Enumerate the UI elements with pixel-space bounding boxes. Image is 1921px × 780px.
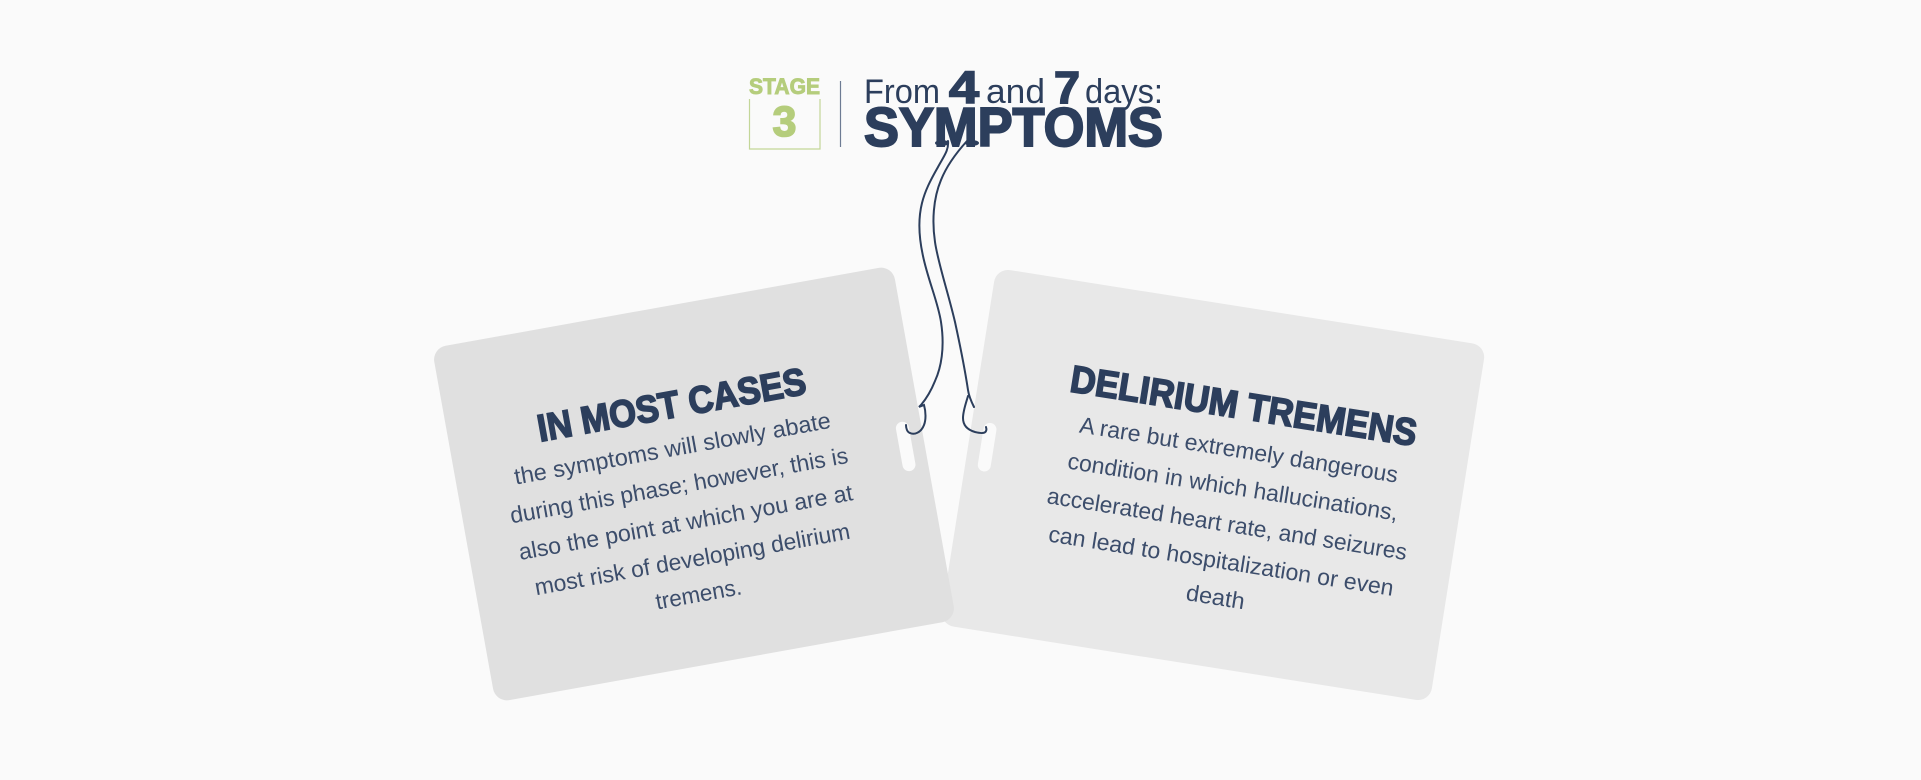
text block: delirium tremens description: A rare but extremely dangerous	[1078, 412, 1400, 488]
stage label: STAGE	[749, 74, 820, 99]
panel: in most cases card	[432, 265, 956, 703]
title line: from 4 and 7 days: From	[864, 73, 940, 111]
title	[864, 62, 1163, 158]
stage box	[750, 99, 820, 149]
text block: delirium tremens description: accelerated heart rate, and seizures	[1045, 482, 1409, 565]
text block: delirium tremens description	[1034, 408, 1421, 638]
text block: delirium tremens description: condition in which hallucinations,	[1066, 448, 1400, 526]
title line: from 4 and 7 days: 4	[949, 62, 979, 113]
stage number: 3	[773, 98, 796, 146]
heading: delirium tremens: DELIRIUM TREMENS	[1067, 359, 1420, 455]
text block: delirium tremens description: can lead to hospitalization or even	[1047, 521, 1396, 601]
thread: right hook	[933, 140, 986, 433]
badge: stage 3	[749, 74, 820, 149]
text block: in most cases description: also the point at which you are at	[516, 479, 855, 565]
thread: left hook	[906, 140, 949, 434]
text block: in most cases description	[501, 405, 870, 637]
title line: from 4 and 7 days: 7	[1054, 62, 1080, 113]
text block: in most cases description: during this phase; however, this is	[508, 442, 850, 528]
title line: from 4 and 7 days: and	[986, 73, 1045, 111]
text block: in most cases description: the symptoms will slowly abate	[512, 407, 833, 489]
divider	[840, 81, 842, 147]
heading: in most cases: IN MOST CASES	[534, 361, 809, 450]
panel: delirium tremens card	[940, 268, 1486, 702]
card slot: right	[984, 429, 990, 465]
title line: symptoms: SYMPTOMS	[864, 96, 1163, 158]
text block: delirium tremens description: death	[1184, 579, 1247, 614]
text block: in most cases description: most risk of developing delirium	[532, 518, 852, 600]
card slot: left	[902, 428, 909, 465]
title line: from 4 and 7 days: days:	[1085, 73, 1163, 111]
text block: in most cases description: tremens.	[653, 573, 744, 614]
title line: from 4 and 7 days	[864, 62, 1163, 113]
